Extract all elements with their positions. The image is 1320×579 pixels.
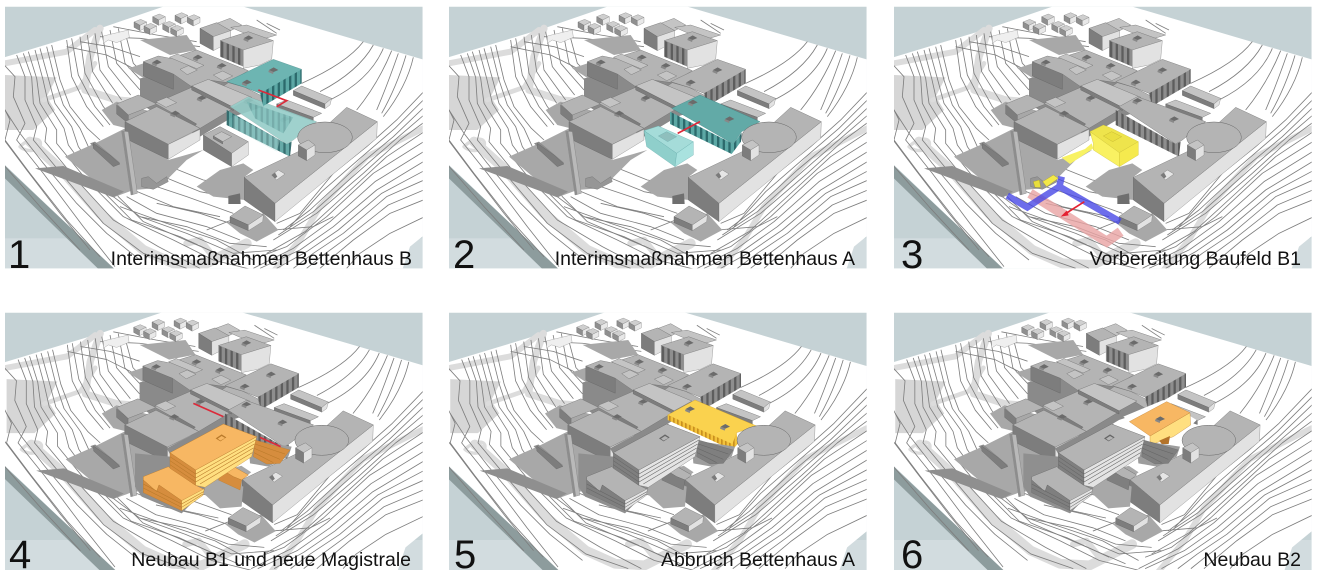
pink building field [1030, 193, 1121, 242]
panel 5: Abbruch Bettenhaus A [449, 312, 867, 570]
number 3: 3 [901, 233, 923, 277]
number 6: 6 [901, 533, 923, 577]
number 2: 2 [453, 233, 475, 277]
yellow wing to demolish [668, 400, 757, 450]
panel 2: Interimsmaßnahmen Bettenhaus A [449, 6, 867, 268]
number 4: 4 [9, 533, 31, 577]
site model 6 [881, 312, 1320, 579]
number 1: 1 [8, 233, 30, 277]
red magistrale lines [193, 403, 281, 447]
caption 1: Interimsmaßnahmen Bettenhaus B [111, 248, 412, 270]
panel 3: Vorbereitung Baufeld B1 [894, 6, 1312, 269]
caption 6: Neubau B2 [1203, 549, 1301, 571]
new building B1 grey [587, 424, 733, 511]
caption 5: Abbruch Bettenhaus A [661, 549, 855, 571]
lower wing teal transparent [227, 97, 317, 157]
red arrow [1061, 202, 1084, 217]
number 5: 5 [454, 533, 476, 577]
panel 6: Neubau B2 [881, 312, 1320, 579]
red connection line [258, 90, 287, 107]
panel 4: Neubau B1 und neue Magistrale [5, 312, 423, 570]
site model 2 [449, 6, 867, 268]
yellow building and link [1033, 125, 1145, 187]
site model 4 [5, 312, 423, 570]
site model 3 [894, 6, 1312, 268]
orange new building B2 [1123, 400, 1197, 444]
caption 4: Neubau B1 und neue Magistrale [131, 549, 411, 571]
transparent small block [644, 126, 700, 167]
panel 1: Interimsmaßnahmen Bettenhaus B [5, 6, 423, 268]
site model 1 [5, 6, 423, 268]
caption 2: Interimsmaßnahmen Bettenhaus A [555, 248, 855, 270]
red connection line [678, 122, 700, 133]
upper wing teal [227, 59, 302, 106]
new building B1 grey [1032, 424, 1178, 511]
lower wing teal [670, 95, 760, 154]
caption 3: Vorbereitung Baufeld B1 [1090, 248, 1301, 270]
new building B1 in orange [143, 424, 290, 511]
site model 5 [449, 312, 867, 570]
blue path [1007, 177, 1120, 222]
